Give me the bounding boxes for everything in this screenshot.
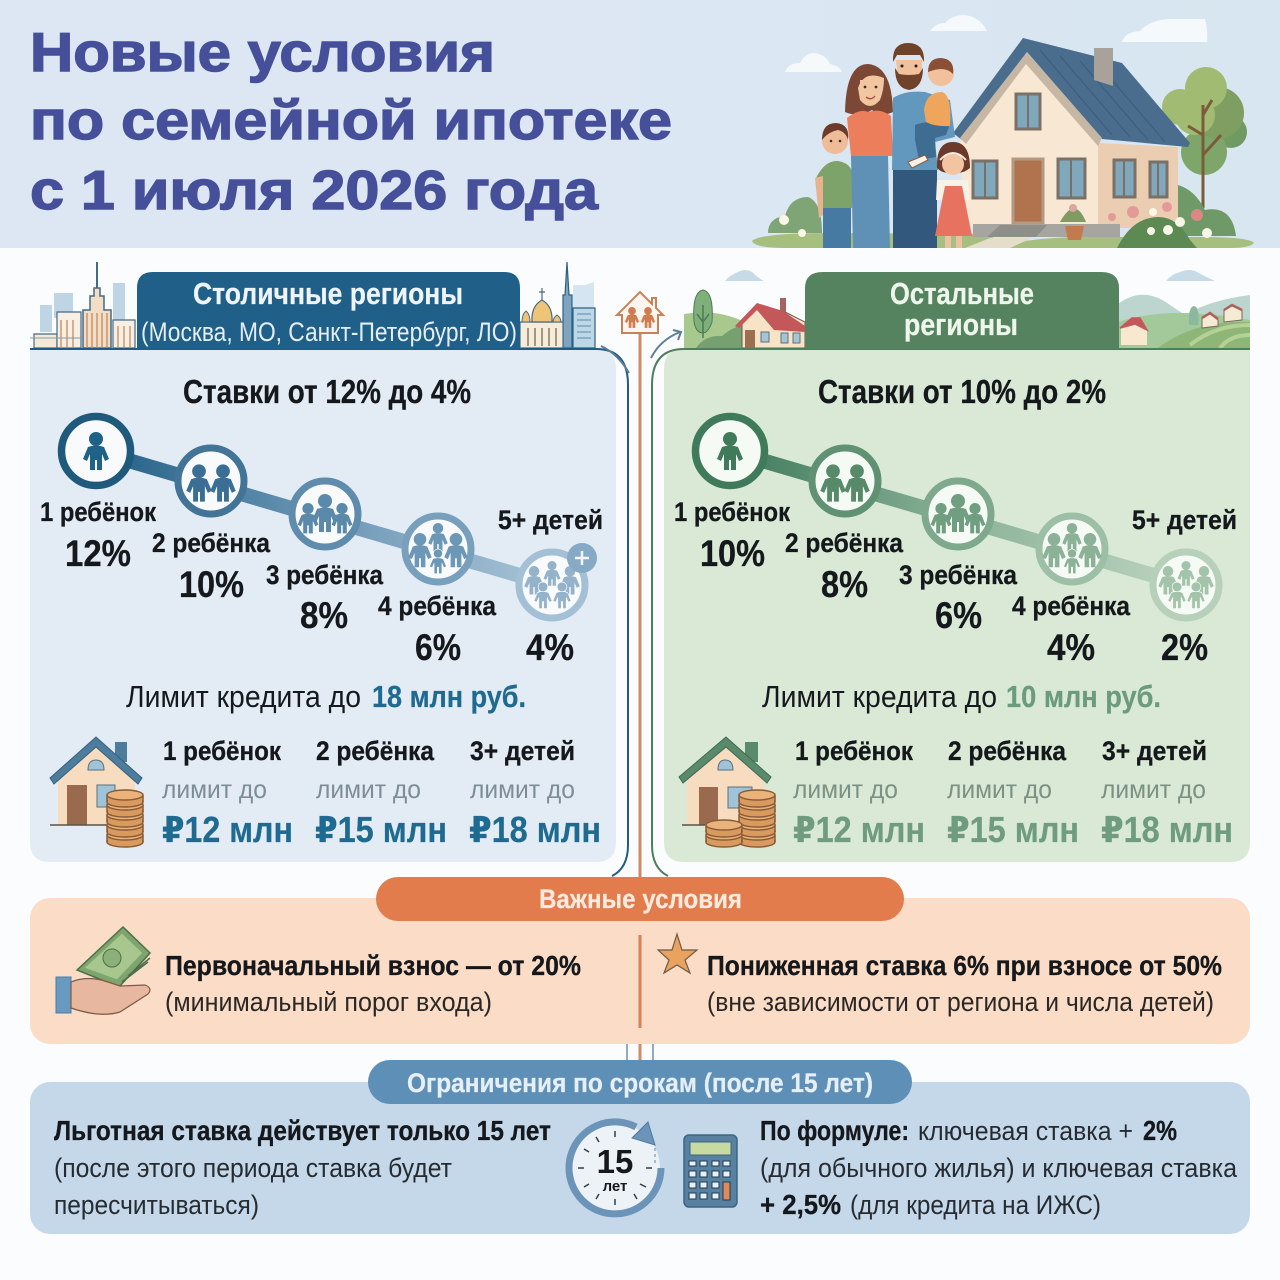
father <box>892 43 955 248</box>
limit table <box>162 736 601 850</box>
limit table: 1 ребёнок <box>163 736 281 766</box>
text: formula: (для кредита на ИЖС) <box>850 1190 1101 1220</box>
limit table: лимит до <box>1101 774 1206 804</box>
text: formula: 2% <box>1143 1115 1177 1146</box>
panel: important conditions <box>30 877 1250 1044</box>
limit table: ₽12 млн <box>793 809 925 850</box>
limit table: 1 ребёнок <box>795 736 913 766</box>
title <box>30 21 672 221</box>
rate labels: 2% <box>1161 627 1208 668</box>
limit table: ₽15 млн <box>315 809 447 850</box>
header tab <box>805 272 1119 349</box>
title: Новые условия <box>30 21 495 83</box>
pill heading: Ограничения по срокам (после 15 лет) <box>407 1068 873 1098</box>
limit table: лимит до <box>793 774 898 804</box>
illustration: family and house <box>752 15 1254 248</box>
rate labels: 6% <box>415 627 461 668</box>
tree <box>1215 116 1247 148</box>
text: down payment <box>165 950 581 1017</box>
heading: rates: Ставки от 10% до 2% <box>818 373 1106 410</box>
limit table: ₽12 млн <box>162 809 293 850</box>
text: formula: (для обычного жилья) и ключевая ставка <box>760 1153 1238 1183</box>
limit table: ₽15 млн <box>947 809 1079 850</box>
text: reduced rate <box>707 950 1222 1017</box>
title: по семейной ипотеке <box>30 89 672 151</box>
credit limit heading: Лимит кредита до <box>126 679 361 714</box>
limit table: лимит до <box>316 774 421 804</box>
step: 2 children <box>178 448 244 514</box>
text: formula: По формуле: <box>760 1115 909 1146</box>
limit table: ₽18 млн <box>469 809 601 850</box>
landscape right <box>1118 295 1250 348</box>
limit table <box>793 736 1233 850</box>
rate ladder line <box>730 451 1186 585</box>
limit table: лимит до <box>470 774 575 804</box>
windows <box>973 94 1167 198</box>
icon: clock 15 years <box>569 1122 661 1214</box>
rate labels: 5+ детей <box>1132 505 1237 535</box>
title: с 1 июля 2026 года <box>30 159 598 221</box>
rate labels: 2 ребёнка <box>152 528 271 558</box>
icon: money in hand <box>56 927 150 1014</box>
rate labels: 4 ребёнка <box>1012 591 1131 621</box>
central connector with house icon <box>601 292 681 1060</box>
text: 15 years: (после этого периода ставка будет <box>54 1153 452 1183</box>
icon: star <box>658 934 697 973</box>
clouds <box>785 15 1207 72</box>
header tab: регионы <box>904 307 1018 342</box>
rate labels: 6% <box>935 595 982 636</box>
house walls <box>960 55 1100 226</box>
header tab: Остальные <box>890 276 1034 311</box>
text: formula <box>760 1115 1238 1220</box>
icon: clock 15 years: 15 <box>597 1143 633 1180</box>
step: 1 child <box>696 416 764 486</box>
landscape left <box>684 270 1215 348</box>
step: 5 children <box>519 543 597 618</box>
text: 15 years: пересчитываться) <box>54 1190 259 1220</box>
step: 4 children <box>1039 516 1105 582</box>
rate labels: 2 ребёнка <box>785 528 904 558</box>
rate labels: 5+ детей <box>498 505 603 535</box>
bushes <box>768 197 822 233</box>
rate labels: 10% <box>179 564 244 605</box>
girl <box>935 142 972 248</box>
mother <box>845 64 893 248</box>
divider <box>638 935 642 1028</box>
panel: term limits <box>30 1060 1250 1234</box>
pill heading <box>368 1060 912 1104</box>
chimney <box>1094 48 1113 86</box>
limit table: 2 ребёнка <box>948 736 1067 766</box>
text: 15 years: Льготная ставка действует только 15 лет <box>54 1115 551 1146</box>
icon: calculator <box>684 1135 737 1207</box>
credit limit heading <box>762 679 1161 714</box>
credit limit heading <box>126 679 526 714</box>
skyline left <box>30 262 135 348</box>
rate labels <box>674 497 1237 668</box>
step: 4 children <box>405 516 471 582</box>
step: 1 child <box>62 416 130 486</box>
limit table: лимит до <box>947 774 1052 804</box>
top border <box>652 349 1250 876</box>
rate labels: 3 ребёнка <box>266 560 384 590</box>
panel: other regions <box>652 270 1250 876</box>
rate ladder line <box>96 451 552 585</box>
credit limit heading: 18 млн руб. <box>372 679 526 714</box>
credit limit heading: Лимит кредита до <box>762 679 997 714</box>
rate labels: 1 ребёнок <box>674 497 790 527</box>
door <box>1013 159 1043 223</box>
header tab <box>137 272 520 349</box>
text: reduced rate: Пониженная ставка 6% при взносе от 50% <box>707 950 1222 981</box>
rate labels: 4% <box>1047 627 1095 668</box>
skyline right <box>520 262 595 348</box>
text: formula: ключевая ставка + <box>918 1116 1133 1146</box>
panel body <box>664 349 1250 862</box>
panel: capital regions <box>30 262 628 876</box>
limit table: 3+ детей <box>470 736 575 766</box>
icon: clock 15 years: лет <box>603 1178 627 1195</box>
credit limit heading: 10 млн руб. <box>1006 679 1161 714</box>
rate labels: 3 ребёнка <box>899 560 1018 590</box>
heading: rates: Ставки от 12% до 4% <box>183 373 471 410</box>
flowers <box>779 202 1212 248</box>
icon: house with coins <box>50 737 143 847</box>
rate labels: 1 ребёнок <box>40 497 156 527</box>
ground <box>752 233 1010 248</box>
panel body <box>30 349 616 862</box>
limit table: 2 ребёнка <box>316 736 435 766</box>
text: formula: + 2,5% <box>760 1189 841 1220</box>
text: down payment: (минимальный порог входа) <box>165 987 492 1017</box>
text: down payment: Первоначальный взнос — от 20% <box>165 950 581 981</box>
toddler <box>908 58 954 168</box>
step: 3 children <box>925 481 991 547</box>
rate labels: 10% <box>700 533 765 574</box>
limit table: 3+ детей <box>1102 736 1207 766</box>
step: 5 children <box>1153 552 1219 618</box>
rate labels: 8% <box>821 564 868 605</box>
pill heading <box>376 877 904 921</box>
pill heading: Важные условия <box>539 884 742 914</box>
rate labels: 4 ребёнка <box>378 591 497 621</box>
limit table: лимит до <box>162 774 267 804</box>
boy <box>815 123 852 248</box>
rate labels <box>40 497 603 668</box>
header background <box>0 0 1280 248</box>
header tab: Столичные регионы <box>193 276 463 311</box>
top border <box>30 349 628 876</box>
rate labels: 4% <box>526 627 574 668</box>
icon: house with coins <box>679 737 775 847</box>
limit table: ₽18 млн <box>1101 809 1233 850</box>
rate labels: 8% <box>300 595 348 636</box>
header tab: (Москва, МО, Санкт-Петербург, ЛО) <box>141 317 517 347</box>
step: 2 children <box>812 448 878 514</box>
text: 15 years <box>54 1115 551 1220</box>
step: 3 children <box>292 481 358 547</box>
rate labels: 12% <box>65 533 131 574</box>
roof <box>953 38 1190 147</box>
text: reduced rate: (вне зависимости от региона и числа детей) <box>707 987 1214 1017</box>
